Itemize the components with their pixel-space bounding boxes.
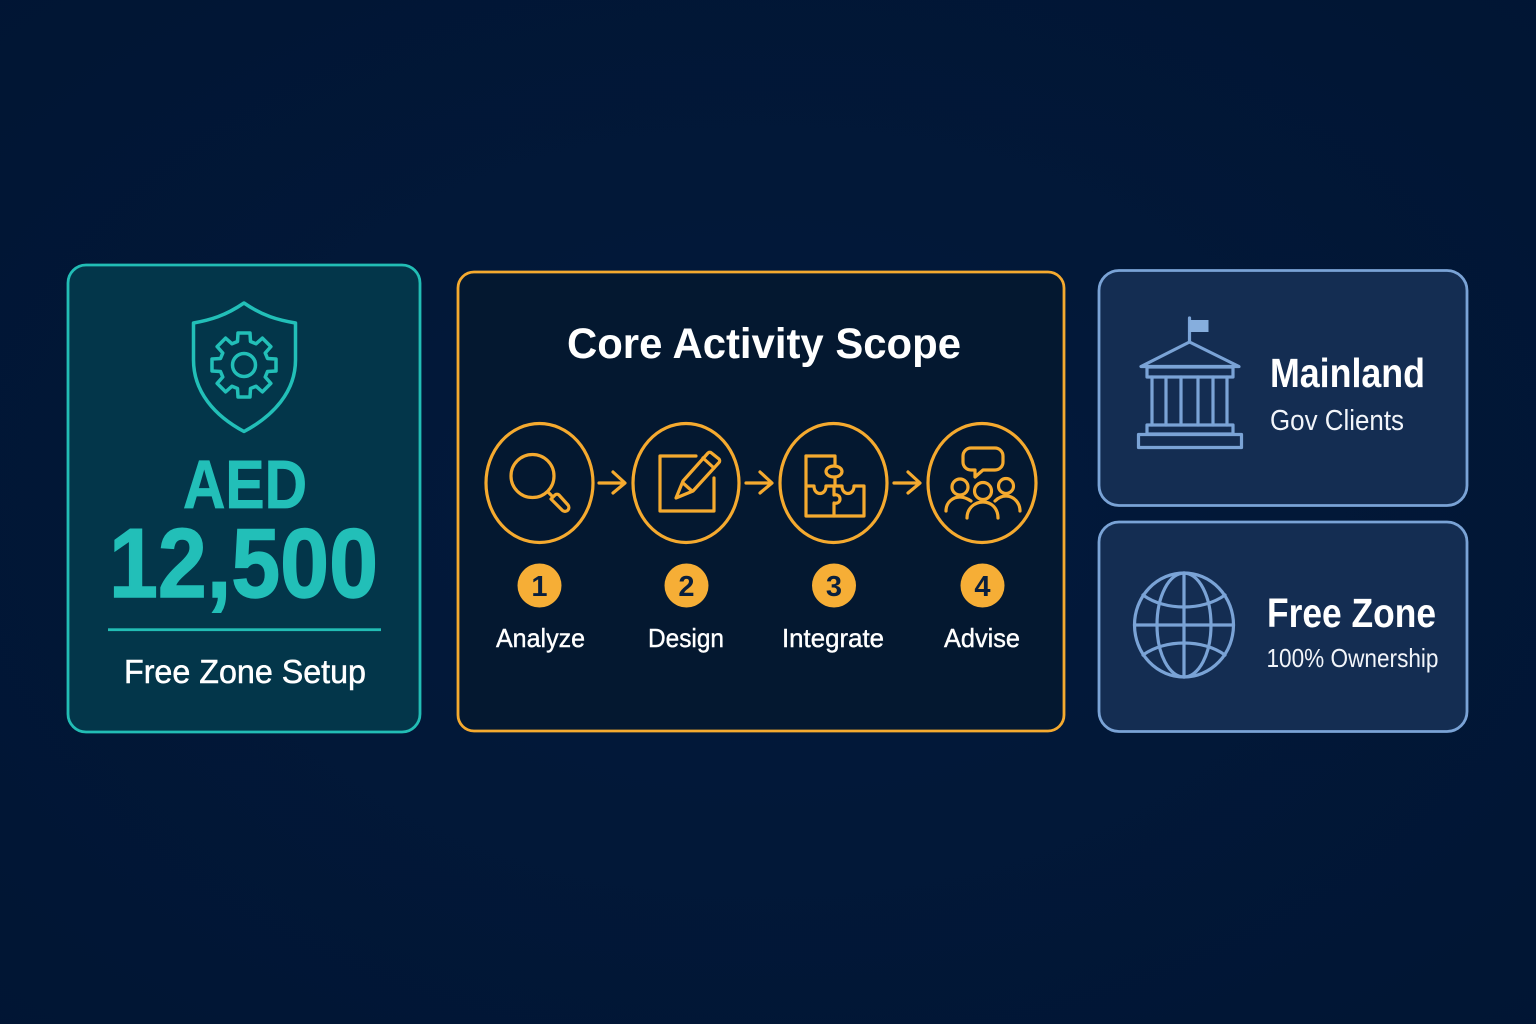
- icon: government building: [1138, 318, 1242, 448]
- price value: 12,500: [109, 508, 378, 618]
- icon: puzzle: [780, 424, 887, 542]
- panel: mainland: [1099, 270, 1467, 506]
- number badge 3: 3: [826, 571, 842, 603]
- number badge 3: [812, 564, 856, 608]
- arrow 3 to 4: [894, 472, 920, 493]
- subtitle: Gov Clients: [1270, 405, 1404, 437]
- icon: magnifier: [486, 424, 593, 542]
- arrow 2 to 3: [746, 472, 772, 493]
- heading: Core Activity Scope: [567, 320, 961, 368]
- icon: shield with gear: [194, 303, 296, 432]
- step 2: design: [633, 424, 739, 653]
- arrow 1 to 2: [599, 472, 625, 493]
- subtitle: 100% Ownership: [1266, 643, 1438, 673]
- currency label: AED: [183, 446, 307, 523]
- panel: free zone: [1099, 522, 1467, 732]
- step 4: advise: [928, 424, 1036, 653]
- icon: people with speech bubble: [928, 424, 1036, 542]
- label: Advise: [944, 623, 1020, 653]
- caption: Free Zone Setup: [124, 653, 366, 690]
- panel: core activity scope: [458, 272, 1064, 731]
- number badge 1: [518, 564, 562, 608]
- step 3: integrate: [780, 424, 887, 653]
- title: Mainland: [1270, 350, 1425, 396]
- panel: free zone setup price: [68, 265, 420, 732]
- number badge 2: 2: [678, 571, 695, 603]
- number badge 4: [960, 564, 1004, 608]
- title: Free Zone: [1267, 590, 1436, 636]
- label: Design: [648, 623, 724, 653]
- step 1: analyze: [486, 424, 593, 653]
- label: Integrate: [782, 623, 884, 653]
- number badge 1: 1: [531, 571, 548, 603]
- icon: globe: [1134, 573, 1234, 677]
- number badge 4: 4: [974, 571, 991, 603]
- divider: [108, 628, 381, 631]
- label: Analyze: [496, 623, 585, 653]
- icon: pencil on square: [633, 424, 739, 542]
- number badge 2: [664, 564, 708, 608]
- flag: [1190, 320, 1208, 332]
